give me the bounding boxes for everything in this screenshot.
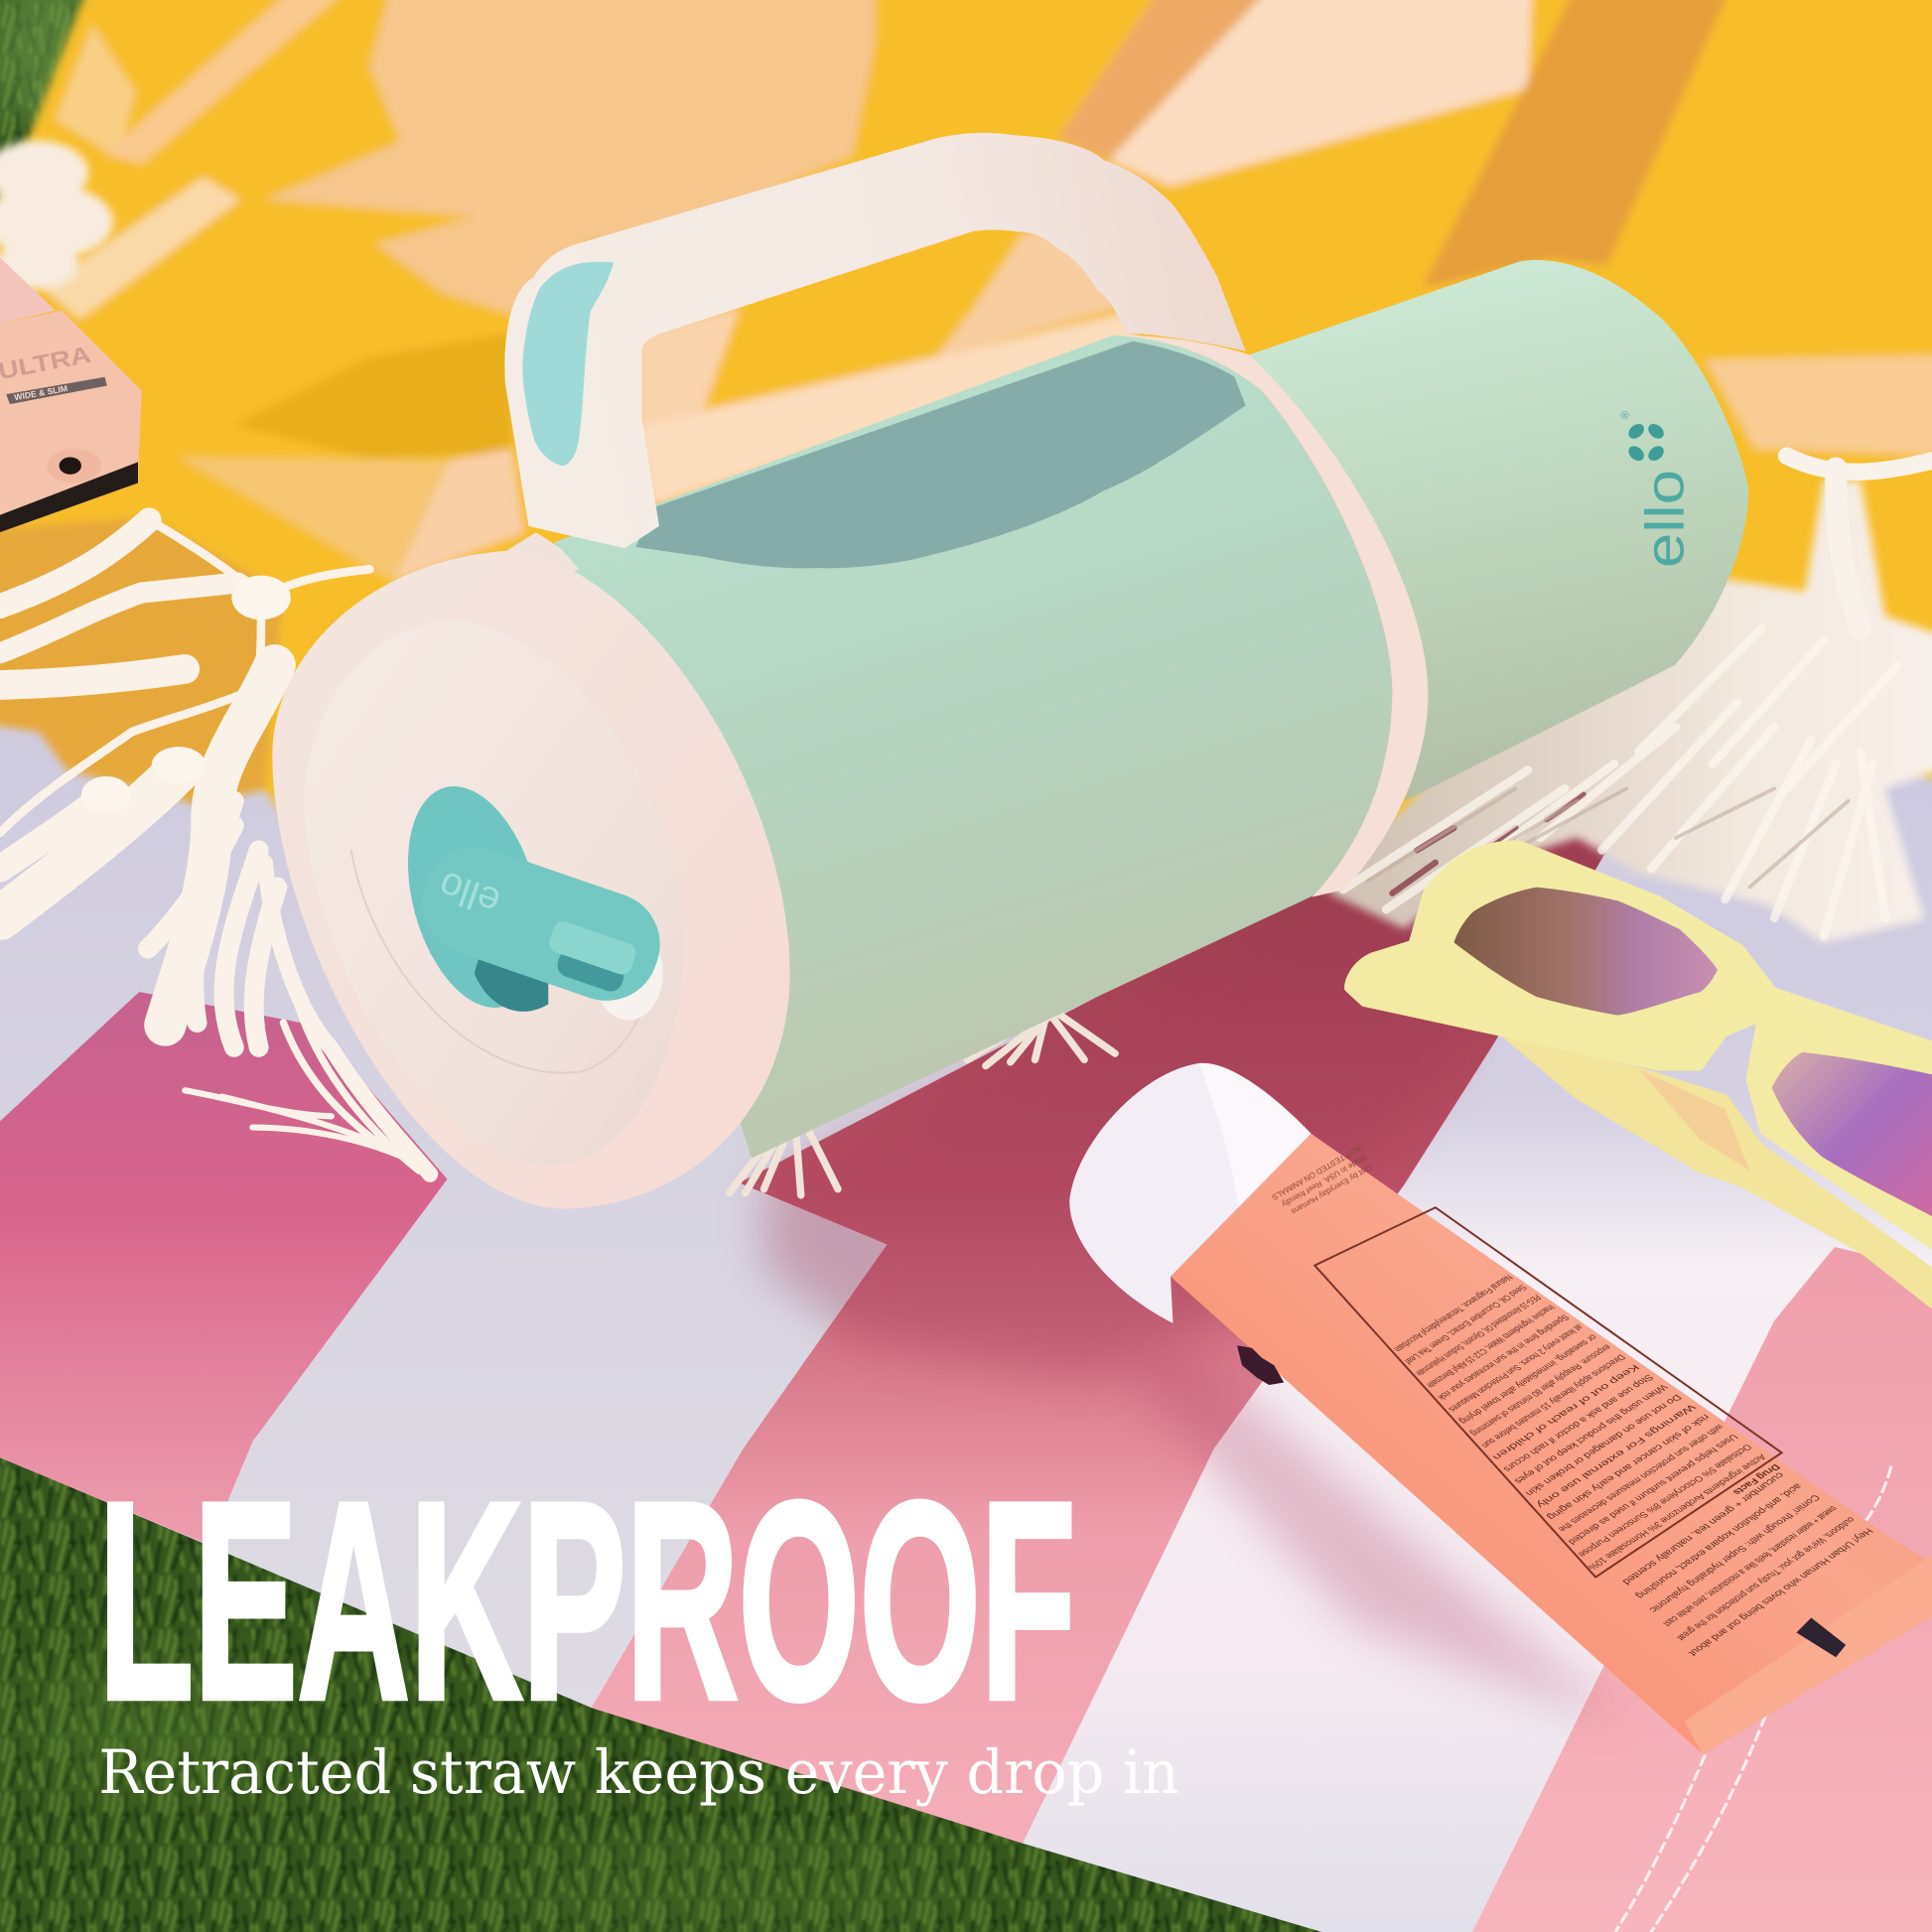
- towel stripe: peach left strip: [43, 178, 240, 319]
- tube: top copy: Made in USA. Reef friendly: [1280, 1153, 1368, 1209]
- phone on towel: WIDE & SLIM: [14, 383, 69, 402]
- towel: dark yellow fold: [234, 333, 511, 459]
- tube: drug facts copy: Warnings For external use only: [1533, 1402, 1698, 1509]
- blanket stitching: [1615, 1466, 1891, 1932]
- tube: drug facts copy: Seed Oil, Cucumber Extract, Green Tea Leaf: [1402, 1283, 1529, 1365]
- lid: inner disc: [305, 620, 684, 1166]
- bottle: brand logo: [1620, 410, 1695, 568]
- fringe: strands: [1343, 628, 1897, 936]
- tube: body copy: acid, anti-pollution kopara extract, nourishing: [1633, 1481, 1805, 1600]
- tube: body copy: cucumber + green tea, naturally scented: [1619, 1470, 1787, 1587]
- tube: body copy: [1597, 1470, 1875, 1658]
- tube: drug facts box: [1314, 1207, 1782, 1578]
- tube: drug facts copy: or sweating, immediately after towel drying: [1456, 1332, 1599, 1426]
- blanket stripe: right white: [1023, 778, 1932, 1932]
- fringe: gaps: [1392, 794, 1584, 894]
- towel stripe: peach right: [1706, 354, 1932, 456]
- tube: top copy: NOT TESTED ON ANIMALS: [1270, 1144, 1362, 1202]
- towel fringe: under bottle: [730, 1011, 1115, 1195]
- slider: embossed logo: ello: [434, 863, 505, 924]
- towel stripe: diagonal peach: [104, 0, 363, 164]
- tube: drug facts copy: Octisalate 5% Octocrylene 8% Sunscreen Purpose: [1575, 1443, 1754, 1559]
- striped towel: [0, 0, 1932, 1109]
- blanket stripe: right pink: [1472, 1247, 1932, 1932]
- tube: drug facts copy: PEG-15 Almondseed Oil, Glycerin, Sodium Hyaluronate: [1413, 1293, 1543, 1378]
- tube: cap: [1069, 1063, 1311, 1323]
- bottle: brand logo: ®: [1620, 410, 1632, 419]
- blanket stripe: left pink: [0, 992, 448, 1545]
- tube: body copy: sweat + water resistant, feels like a moisturizer, zero white cast: [1660, 1504, 1840, 1628]
- tube: badge: [1237, 1345, 1284, 1385]
- lid: teal disc: [385, 771, 563, 1023]
- picnic blanket: [0, 702, 1932, 1932]
- tube: drug facts copy: at least every 2 hours. Sun Protection Measures: [1446, 1322, 1585, 1414]
- tube: body copy: outdoors. We've got you: Trusty sun protection for the great: [1674, 1515, 1858, 1642]
- sunglasses: [1348, 844, 1932, 1307]
- tube: drug facts copy: Do not use on damaged or broken skin: [1522, 1392, 1684, 1497]
- tube: body copy: Comin' through with: Super hydrating hyaluronic: [1647, 1493, 1823, 1614]
- bottle: rear section: [1249, 260, 1748, 801]
- title: LEAKPROOF: [98, 1444, 1075, 1757]
- tube: drug facts copy: Natural Fragrance, Tetrahexyldecyl Ascorbate: [1391, 1273, 1515, 1353]
- tube: drug facts copy: Inactive Ingredients Water, C12-15 Alkyl Benzoate: [1424, 1303, 1557, 1390]
- towel stripe: peach upper: [265, 0, 875, 314]
- tube: drug facts copy: exposure. Reapply after 80 minutes of swimming: [1467, 1342, 1613, 1438]
- sunglasses: arms: [1507, 1037, 1932, 1307]
- tube: crimp seal: [1685, 1555, 1932, 1754]
- tube: drug facts copy: Spending time in the sun increases your risk: [1435, 1312, 1571, 1402]
- tube: drug facts copy: Directions apply liberally 15 minutes before sun: [1478, 1352, 1627, 1449]
- tube: body copy: Hey! Urban Human who loves being out and about: [1686, 1526, 1875, 1658]
- tube: drug facts copy: When using this product keep out of eyes: [1511, 1382, 1669, 1485]
- blanket stripe: centre pink: [592, 740, 1614, 1844]
- tube: top copy: [1270, 1144, 1374, 1221]
- sunglasses: left lens: [1453, 888, 1718, 1016]
- bottle: brand logo: ello: [1634, 470, 1695, 568]
- tube: body: [1171, 1134, 1932, 1752]
- tube: drug facts copy: with other sun protection measures decreases the: [1555, 1422, 1726, 1534]
- tube: drug facts copy: Drug Facts: [1729, 1462, 1782, 1497]
- bottle: handle: [504, 133, 1246, 548]
- sunglasses: right lens: [1772, 1052, 1932, 1216]
- tube: drug facts copy: risk of skin cancer and early skin aging: [1545, 1412, 1712, 1521]
- tube: drug facts copy: Keep out of reach of children: [1489, 1362, 1641, 1461]
- towel fringe: left top: [0, 140, 113, 290]
- tube: drug facts copy: Active ingredients Avobenzone 3% Homosalate 10%: [1585, 1452, 1768, 1572]
- towel stripe: peach fold shaded: [1058, 0, 1282, 160]
- bottle: main body: [554, 336, 1392, 1159]
- bottle: lid: [272, 532, 790, 1208]
- subtitle: Retracted straw keeps every drop in: [98, 1738, 1179, 1808]
- bottle: sleeve band: [1114, 336, 1428, 897]
- handle: teal grip: [522, 262, 614, 466]
- bottle shadow on blanket: [763, 863, 1466, 1380]
- towel: orange fold: [1422, 0, 1736, 288]
- sunscreen tube shadow: [1109, 1343, 1626, 1725]
- towel stripe: top left: [56, 25, 136, 158]
- tube: seal mark: [1796, 1618, 1846, 1657]
- tube: top copy: Dist by Everyday Humans: [1290, 1163, 1374, 1216]
- towel stripe: peach behind handle: [634, 313, 1140, 505]
- towel stripe: peach lower: [394, 449, 523, 582]
- tube: drug facts copy: Stop use and ask a doctor if rash occurs: [1500, 1372, 1655, 1473]
- sunglasses: frame: [1348, 844, 1932, 1246]
- towel: orange lower left: [0, 517, 283, 804]
- lid: teal slider: [408, 833, 674, 1015]
- tube: drug facts copy: [1331, 1272, 1783, 1582]
- towel stripe: peach fold light: [1109, 0, 1533, 186]
- bottle: handle shadow: [635, 342, 1246, 568]
- phone on towel: [0, 257, 142, 532]
- towel fringe: left: [0, 520, 431, 1174]
- towel fringe: right cluster: [1327, 454, 1932, 942]
- sunscreen tube: [1069, 1063, 1932, 1754]
- tube: drug facts copy: Uses helps prevent sunburn if used as directed: [1566, 1433, 1739, 1546]
